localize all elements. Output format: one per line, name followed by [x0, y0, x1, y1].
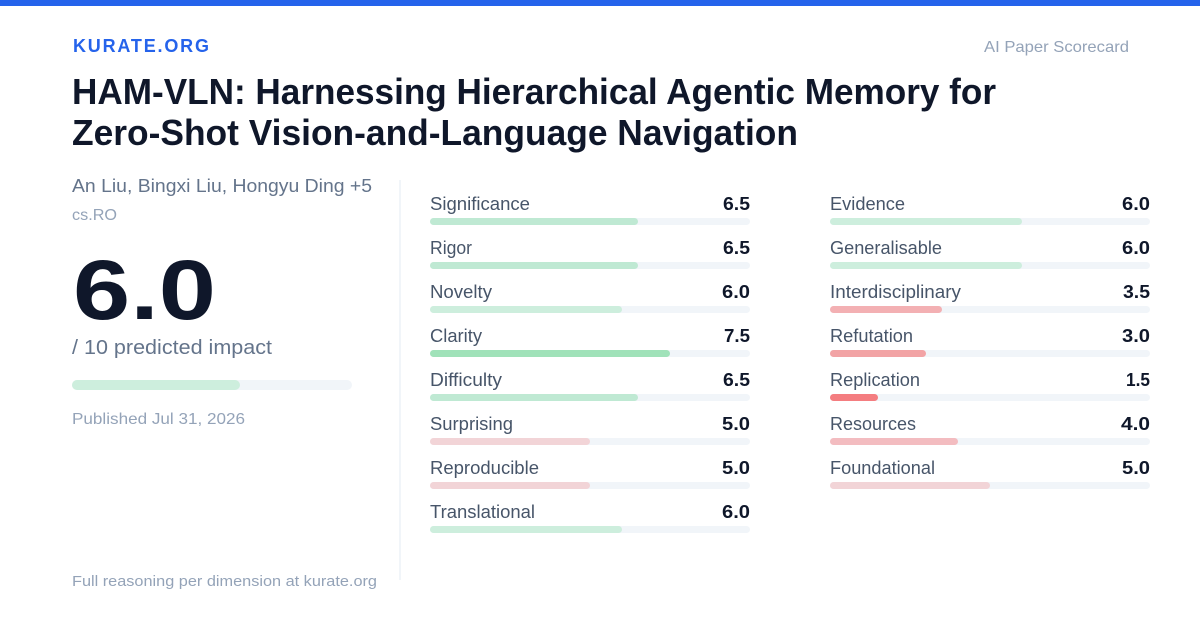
row: Replication [830, 370, 1150, 401]
row: Interdisciplinary: Interdisciplinary [830, 282, 961, 302]
overall score: 6.0 [73, 243, 216, 337]
row: Resources: 4.0 [1121, 414, 1150, 434]
row: Significance: Significance [430, 194, 530, 214]
row: Novelty [430, 282, 750, 313]
row: Clarity [430, 326, 750, 357]
row: Evidence [830, 194, 1150, 225]
row: Refutation [830, 326, 1150, 357]
panel: left dimension scores [430, 194, 750, 533]
publication date: Published Jul 31, 2026 [72, 411, 245, 428]
row: Translational: 6.0 [722, 502, 750, 522]
row: Generalisable: 6.0 [1122, 238, 1150, 258]
row: Rigor: 6.5 [723, 238, 750, 258]
row: Difficulty: 6.5 [723, 370, 750, 390]
row: Surprising [430, 414, 750, 445]
row: Refutation: Refutation [830, 326, 913, 346]
tagline: AI Paper Scorecard [984, 39, 1129, 56]
title: Zero-Shot Vision-and-Language Navigation [72, 112, 798, 153]
row: Generalisable [830, 238, 1150, 269]
title [72, 71, 996, 153]
row: Clarity: Clarity [430, 326, 482, 346]
row: Foundational: Foundational [830, 458, 935, 478]
row: Surprising: 5.0 [722, 414, 750, 434]
category: cs.RO [72, 207, 117, 224]
row: Resources [830, 414, 1150, 445]
row: Surprising: Surprising [430, 414, 513, 434]
row: Translational [430, 502, 750, 533]
row: Translational: Translational [430, 502, 535, 522]
score caption: / 10 predicted impact [72, 337, 272, 359]
overall score bar [72, 380, 352, 390]
row: Rigor [430, 238, 750, 269]
row: Replication: Replication [830, 370, 920, 390]
row: Resources: Resources [830, 414, 916, 434]
row: Interdisciplinary [830, 282, 1150, 313]
authors: An Liu, Bingxi Liu, Hongyu Ding +5 [72, 176, 372, 196]
row: Evidence: Evidence [830, 194, 905, 214]
title: HAM-VLN: Harnessing Hierarchical Agentic Memory for [72, 71, 996, 112]
panel: summary [72, 176, 377, 590]
row: Rigor: Rigor [430, 238, 472, 258]
row: Difficulty [430, 370, 750, 401]
row: Refutation: 3.0 [1122, 326, 1150, 346]
row: Replication: 1.5 [1126, 370, 1150, 390]
row: Generalisable: Generalisable [830, 238, 942, 258]
row: Novelty: 6.0 [722, 282, 750, 302]
row: Foundational: 5.0 [1122, 458, 1150, 478]
row: Evidence: 6.0 [1122, 194, 1150, 214]
row: Significance: 6.5 [723, 194, 750, 214]
row: Difficulty: Difficulty [430, 370, 502, 390]
row: Reproducible: 5.0 [722, 458, 750, 478]
brand: KURATE.ORG [73, 36, 209, 56]
row: Significance [430, 194, 750, 225]
row: Reproducible [430, 458, 750, 489]
row: Clarity: 7.5 [724, 326, 750, 346]
footer note: Full reasoning per dimension at kurate.org [72, 573, 377, 590]
row: Novelty: Novelty [430, 282, 492, 302]
panel: right dimension scores [830, 194, 1150, 489]
row: Foundational [830, 458, 1150, 489]
row: Interdisciplinary: 3.5 [1123, 282, 1150, 302]
row: Reproducible: Reproducible [430, 458, 539, 478]
